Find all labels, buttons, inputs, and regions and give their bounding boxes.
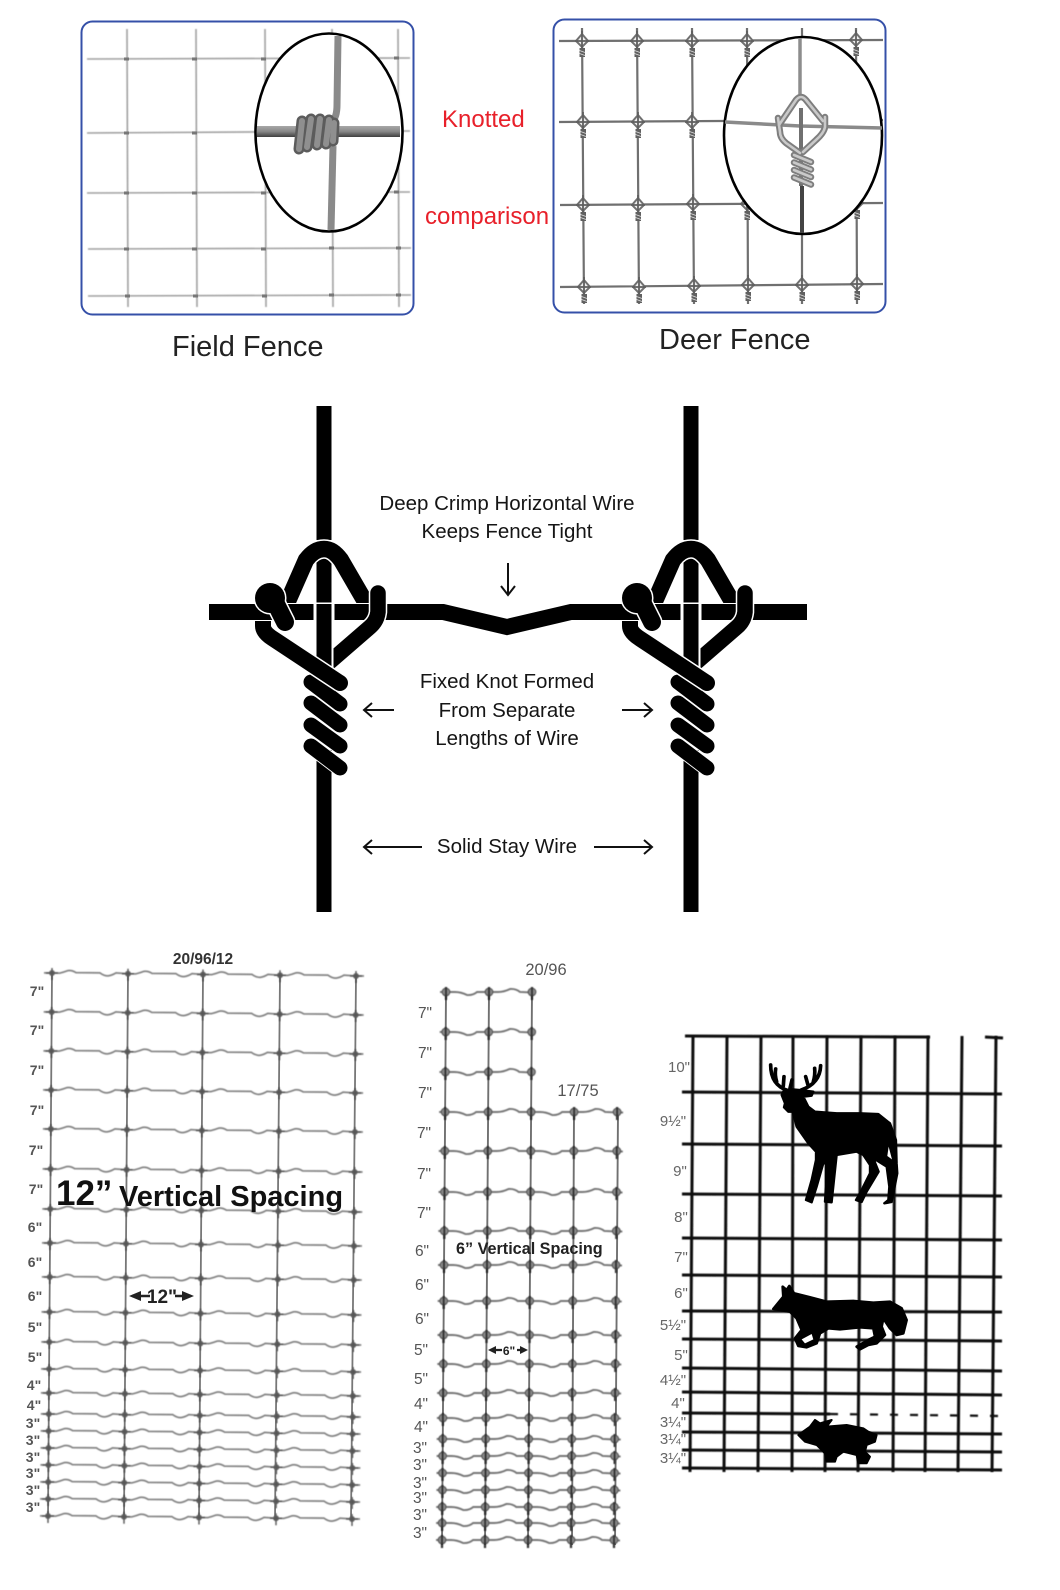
overlay: 12 inch vertical spacing: 12” — [56, 1174, 112, 1213]
spacing labels: 3" — [26, 1499, 40, 1515]
arrow: to right knot — [622, 703, 652, 717]
spacing labels: 10" — [668, 1059, 690, 1076]
spacing labels: 3" — [413, 1507, 427, 1524]
spacing labels: 6" — [28, 1219, 42, 1235]
spacing labels: 4" — [671, 1395, 685, 1412]
icon: deer silhouette — [771, 1065, 897, 1203]
horizontal line wires — [40, 968, 364, 1526]
knot: right — [620, 406, 745, 912]
text: fixed knot — [420, 670, 594, 750]
arrow: stay wire left — [364, 840, 422, 854]
spacing labels: 7" — [30, 1062, 44, 1078]
chart: 20/96/12 fence spacing — [26, 951, 364, 1526]
spacing labels — [413, 1005, 432, 1542]
icon: fox silhouette — [773, 1286, 907, 1349]
arrow: to left knot — [364, 703, 394, 717]
spacing labels: 7" — [30, 1022, 44, 1038]
spacing labels: 3" — [413, 1490, 427, 1507]
spacing labels: 3" — [26, 1415, 40, 1431]
chart title: 20/96/12 — [173, 951, 233, 968]
spacing labels: 7" — [418, 1045, 432, 1062]
dimension: 6 inch — [488, 1344, 528, 1358]
spacing labels: 5" — [414, 1342, 428, 1359]
spacing labels: 3" — [413, 1440, 427, 1457]
spacing labels: 4½" — [660, 1372, 686, 1389]
spacing labels: 5½" — [660, 1317, 686, 1334]
spacing labels: 7" — [417, 1166, 431, 1183]
text: deep crimp — [379, 492, 635, 543]
horizontal line wires — [436, 987, 623, 1548]
spacing labels: 3¼" — [660, 1431, 686, 1448]
spacing labels: 7" — [30, 983, 44, 999]
panel: deer fence photo — [554, 20, 886, 312]
chart title: 20/96: 20/96 — [525, 961, 567, 979]
spacing labels: 7" — [674, 1249, 688, 1266]
spacing labels: 4" — [27, 1397, 41, 1413]
vertical stay wires — [442, 992, 618, 1545]
spacing labels: 5" — [674, 1347, 688, 1364]
spacing labels: 6" — [415, 1277, 429, 1294]
heading: knotted comparison — [425, 106, 549, 230]
spacing labels — [26, 983, 44, 1515]
panel: field fence photo — [82, 22, 414, 314]
grid horizontal wires — [682, 1036, 1003, 1470]
spacing labels: 4" — [414, 1396, 428, 1413]
spacing labels: 6" — [415, 1311, 429, 1328]
spacing labels: 5" — [28, 1319, 42, 1335]
spacing labels: 7" — [418, 1005, 432, 1022]
spacing labels: 9½" — [660, 1113, 686, 1130]
spacing labels: 7" — [29, 1142, 43, 1158]
text: solid stay wire: Solid Stay Wire — [437, 835, 577, 858]
spacing labels: 7" — [417, 1205, 431, 1222]
spacing labels: 3" — [26, 1482, 40, 1498]
spacing labels: 6" — [28, 1288, 42, 1304]
spacing labels: 6" — [28, 1254, 42, 1270]
label: field fence: Field Fence — [172, 331, 324, 363]
dimension: 12 inch: 12" — [147, 1287, 177, 1308]
text: fixed knot: Fixed Knot Formed — [420, 670, 594, 693]
spacing labels: 7" — [30, 1102, 44, 1118]
spacing labels: 3¼" — [660, 1450, 686, 1467]
text: deep crimp: Keeps Fence Tight — [422, 520, 593, 543]
chart: animal exclusion grid — [660, 1036, 1003, 1472]
spacing labels: 5" — [28, 1349, 42, 1365]
grid vertical wires — [690, 1036, 996, 1472]
arrow: stay wire right — [594, 840, 652, 854]
heading: knotted comparison: Knotted — [442, 106, 525, 133]
spacing labels: 4" — [27, 1377, 41, 1393]
circle inset: field fence knot — [256, 34, 402, 232]
spacing labels: 6" — [674, 1285, 688, 1302]
spacing labels: 7" — [417, 1125, 431, 1142]
knot: left — [254, 406, 378, 912]
spacing labels: 3" — [413, 1525, 427, 1542]
spacing labels: 8" — [674, 1209, 688, 1226]
spacing labels: 5" — [414, 1371, 428, 1388]
overlay: 12 inch vertical spacing: Vertical Spacing — [119, 1181, 343, 1213]
spacing labels: 3" — [26, 1465, 40, 1481]
diagram: fixed knot detail — [209, 406, 807, 912]
label: deer fence: Deer Fence — [659, 324, 811, 356]
dimension: 6 inch: 6" — [503, 1344, 515, 1358]
dimension: 12 inch — [129, 1287, 194, 1308]
chart: 20/96 and 17/75 fence spacing — [413, 961, 623, 1548]
spacing labels: 3" — [413, 1475, 427, 1492]
horizontal crimped wire — [209, 612, 807, 627]
heading: knotted comparison: comparison — [425, 203, 549, 230]
arrow: crimp pointer — [501, 563, 515, 595]
spacing labels: 7" — [418, 1085, 432, 1102]
spacing labels: 7" — [29, 1181, 43, 1197]
spacing labels: 4" — [414, 1419, 428, 1436]
overlay: 6 inch vertical spacing: 6” Vertical Spacing — [456, 1240, 603, 1258]
circle inset: deer fence knot — [724, 37, 882, 234]
text: deep crimp: Deep Crimp Horizontal Wire — [379, 492, 635, 515]
spacing labels: 3" — [413, 1457, 427, 1474]
vertical stay wires — [48, 973, 356, 1520]
spacing labels: 3" — [26, 1449, 40, 1465]
spacing labels — [660, 1059, 690, 1467]
icon: rabbit silhouette — [798, 1420, 877, 1463]
spacing labels: 3¼" — [660, 1414, 686, 1431]
text: fixed knot: Lengths of Wire — [435, 727, 579, 750]
spacing labels: 3" — [26, 1432, 40, 1448]
chart title: 17/75: 17/75 — [557, 1082, 599, 1100]
spacing labels: 6" — [415, 1243, 429, 1260]
spacing labels: 9" — [673, 1163, 687, 1180]
text: fixed knot: From Separate — [439, 699, 575, 722]
overlay: 12 inch vertical spacing — [56, 1174, 343, 1213]
